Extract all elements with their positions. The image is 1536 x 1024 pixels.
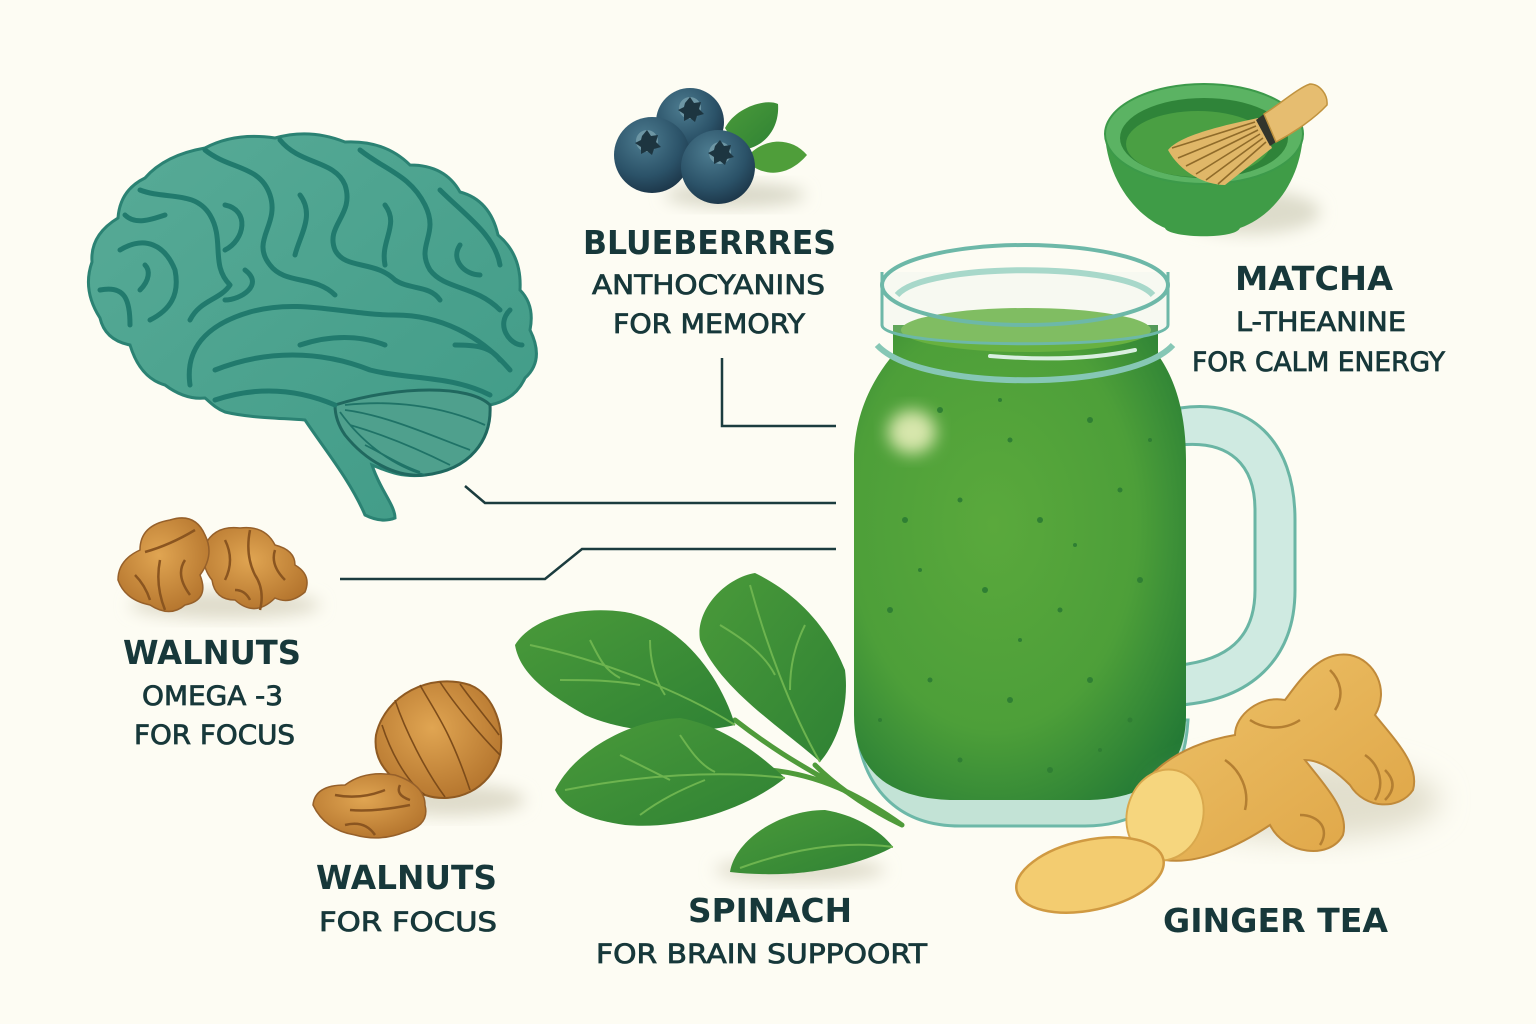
heading: spinach: SPINACH (688, 891, 852, 930)
text: for calm energy: FOR CALM ENERGY (1192, 347, 1445, 378)
icon: blueberries (614, 88, 807, 207)
heading: ginger tea: GINGER TEA (1163, 901, 1388, 940)
text: for brain support: FOR BRAIN SUPPOORT (596, 939, 928, 970)
connector: blueberries to smoothie (722, 358, 836, 426)
smoothie surface (901, 308, 1151, 352)
ginger root (1130, 654, 1414, 861)
text: anthocyanins: ANTHOCYANINS (592, 270, 825, 301)
text: omega-3: OMEGA -3 (142, 681, 283, 712)
jar glass base (856, 720, 1188, 826)
leaf left (515, 610, 735, 732)
jar lip (882, 272, 1168, 344)
cut face (1116, 761, 1214, 869)
jar handle (1180, 407, 1295, 705)
icon: matcha bowl (1105, 84, 1327, 236)
spinach stems (735, 720, 902, 825)
text: for memory: FOR MEMORY (613, 309, 806, 340)
smoothie (854, 325, 1186, 800)
glare (990, 350, 1135, 358)
leaf lower (555, 718, 785, 826)
leaf small (730, 810, 893, 874)
connector: walnuts to smoothie (340, 549, 836, 579)
text: l-theanine: L-THEANINE (1236, 307, 1406, 338)
heading: matcha: MATCHA (1235, 259, 1393, 298)
leaf top (699, 573, 846, 762)
icon: ginger (1009, 654, 1440, 925)
highlight (888, 410, 936, 454)
text: for focus: FOR FOCUS (134, 720, 295, 751)
icon: walnuts pile (118, 518, 320, 619)
heading: walnuts second: WALNUTS (316, 858, 497, 897)
heading: walnuts: WALNUTS (123, 633, 301, 672)
icon: brain (88, 134, 536, 520)
icon: smoothie jar (854, 245, 1295, 826)
jar neck ring (877, 345, 1173, 380)
heading: blueberries: BLUEBERRRES (583, 223, 836, 262)
icon: spinach (515, 573, 902, 882)
ginger slice (1009, 825, 1171, 925)
text: for focus second: FOR FOCUS (319, 907, 497, 938)
speckles (878, 398, 1152, 773)
icon: whole walnut and half (313, 681, 525, 838)
connector: brain to smoothie (465, 486, 836, 503)
